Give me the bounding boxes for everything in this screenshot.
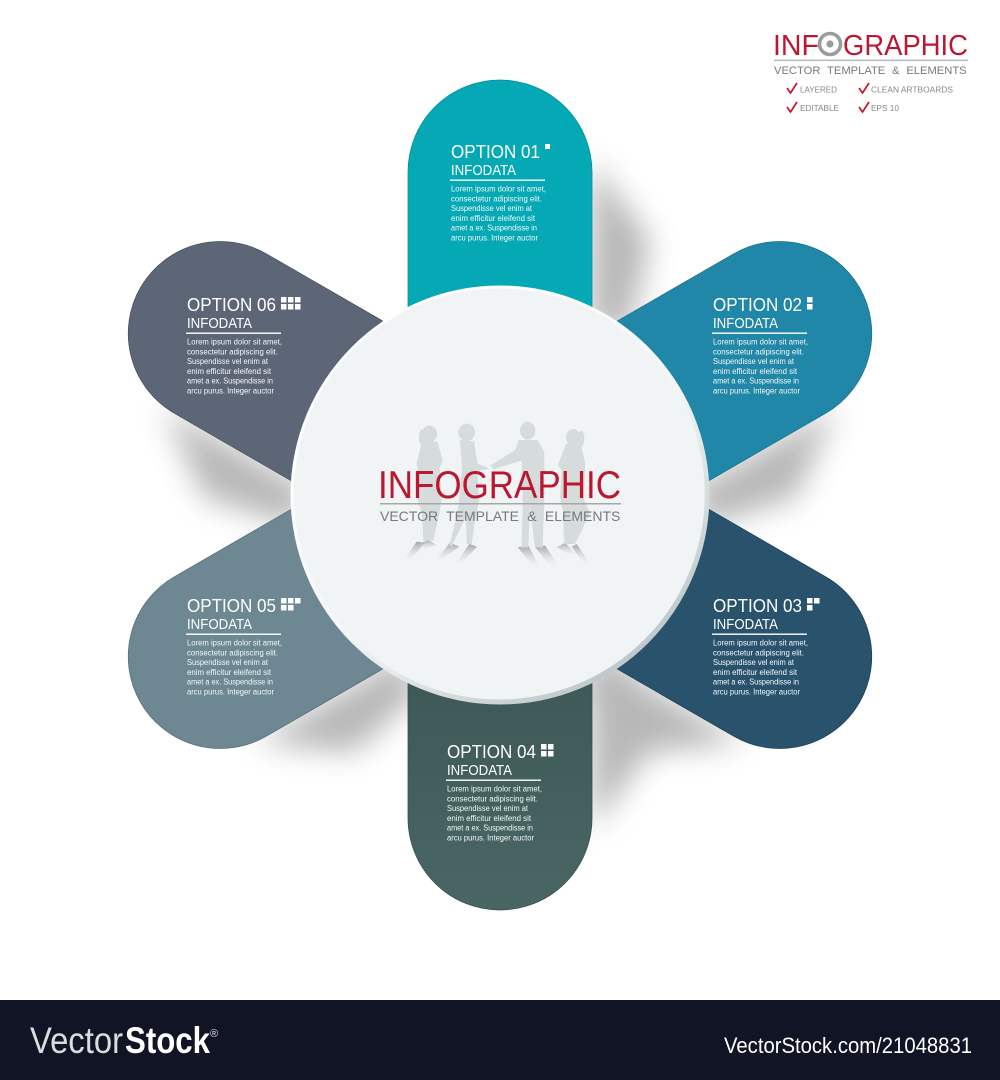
option 03 text: arcu purus. Integer auctor [713, 688, 800, 696]
option 06 text: consectetur adipiscing elit. [187, 347, 278, 356]
feature checklist: EPS 10 [871, 103, 899, 113]
option 03 text: enim efficitur eleifend sit [713, 668, 798, 677]
option 02 text [712, 294, 812, 396]
option 02 text: INFODATA [713, 316, 778, 332]
central circle [290, 286, 710, 704]
option 02 text: consectetur adipiscing elit. [713, 347, 804, 356]
footer logo: ® [210, 1028, 218, 1040]
option 01 text: INFODATA [451, 163, 516, 179]
option 03 text: Suspendisse vel enim at [713, 658, 795, 667]
option 02 text: arcu purus. Integer auctor [713, 386, 800, 396]
option 03 text [712, 595, 820, 696]
option 06 text: OPTION 06 [187, 294, 276, 315]
option 06 text: enim efficitur eleifend sit [187, 367, 272, 376]
option 03 text: INFODATA [713, 617, 778, 633]
option 05 text: arcu purus. Integer auctor [187, 688, 274, 696]
option 04 text: consectetur adipiscing elit. [447, 794, 538, 803]
top right logo [773, 30, 968, 77]
option 04 text: Suspendisse vel enim at [447, 804, 529, 813]
option 04 text: OPTION 04 [447, 741, 536, 762]
footer logo [30, 1020, 218, 1061]
option 05 text: consectetur adipiscing elit. [187, 648, 278, 657]
option 06 text: arcu purus. Integer auctor [187, 386, 274, 396]
center title [378, 464, 621, 524]
option 03 text: amet a ex. Suspendisse in [713, 678, 799, 687]
option 04 text [446, 741, 554, 842]
footer bar [0, 1000, 1000, 1080]
petal shadows [135, 160, 865, 830]
option 06 text: Lorem ipsum dolor sit amet, [187, 338, 282, 346]
top right logo: GRAPHIC [843, 30, 968, 62]
option 05 text: INFODATA [187, 617, 252, 633]
option 03 text: consectetur adipiscing elit. [713, 648, 804, 657]
option 05 text: Lorem ipsum dolor sit amet, [187, 638, 282, 648]
option 04 text: arcu purus. Integer auctor [447, 834, 534, 842]
option 04 text: Lorem ipsum dolor sit amet, [447, 784, 542, 794]
option 04 text: amet a ex. Suspendisse in [447, 824, 533, 833]
option 01 text: consectetur adipiscing elit. [451, 194, 542, 203]
option 05 text: OPTION 05 [187, 595, 276, 616]
center title: INFOGRAPHIC [378, 464, 621, 507]
silhouettes of people [404, 422, 590, 566]
option 04 text: INFODATA [447, 763, 512, 779]
option 01 text: amet a ex. Suspendisse in [451, 224, 537, 233]
option 01 text: Suspendisse vel enim at [451, 204, 533, 213]
footer logo: Vector [30, 1020, 123, 1061]
option 06 text: INFODATA [187, 316, 252, 332]
feature checklist [787, 83, 953, 113]
option 02 text: OPTION 02 [713, 294, 802, 315]
top right logo: VECTOR TEMPLATE & ELEMENTS [774, 65, 967, 77]
petal 5 shape [95, 415, 546, 782]
option 04 text: enim efficitur eleifend sit [447, 814, 532, 823]
option 01 text [450, 141, 550, 242]
option 06 text: Suspendisse vel enim at [187, 357, 269, 366]
petal 4 shape [408, 495, 592, 910]
option 03 text: OPTION 03 [713, 595, 802, 616]
option 06 text: amet a ex. Suspendisse in [187, 377, 273, 386]
feature checklist: LAYERED [800, 84, 837, 94]
option 01 text: Lorem ipsum dolor sit amet, [451, 184, 546, 194]
option 02 text: Suspendisse vel enim at [713, 357, 795, 366]
top right logo: INF [773, 30, 819, 62]
option 01 text: OPTION 01 [451, 141, 540, 162]
feature checklist: CLEAN ARTBOARDS [871, 84, 953, 94]
option 05 text: enim efficitur eleifend sit [187, 668, 272, 677]
option 03 text: Lorem ipsum dolor sit amet, [713, 638, 808, 648]
option 05 text [186, 595, 300, 696]
petal 1 shape [408, 80, 592, 495]
footer logo: Stock [125, 1020, 210, 1061]
option 02 text: amet a ex. Suspendisse in [713, 377, 799, 386]
option 05 text: amet a ex. Suspendisse in [187, 678, 273, 687]
option 01 text: enim efficitur eleifend sit [451, 214, 536, 223]
footer url: VectorStock.com/21048831 [724, 1033, 972, 1058]
option 01 text: arcu purus. Integer auctor [451, 234, 538, 242]
petal 3 shape [454, 415, 905, 782]
option 02 text: Lorem ipsum dolor sit amet, [713, 338, 808, 346]
center title: VECTOR TEMPLATE & ELEMENTS [380, 508, 620, 524]
petal 2 shape [454, 208, 905, 575]
feature checklist: EDITABLE [800, 103, 839, 113]
option 06 text [186, 294, 300, 396]
petal 6 shape [95, 208, 546, 575]
option 05 text: Suspendisse vel enim at [187, 658, 269, 667]
option 02 text: enim efficitur eleifend sit [713, 367, 798, 376]
